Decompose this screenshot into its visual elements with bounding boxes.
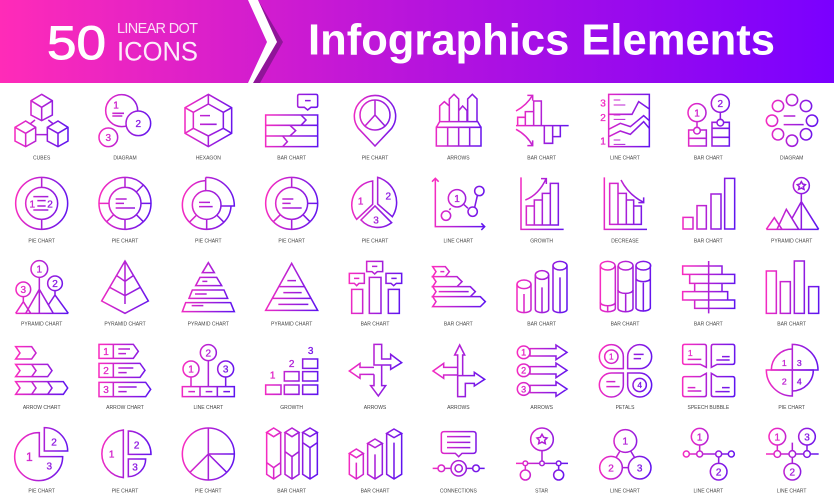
label: arrows: ARROWS (447, 405, 470, 411)
title: Infographics Elements (308, 16, 775, 64)
icon: pie chart numbered: 2 (47, 199, 53, 210)
label: pyramid chart: PYRAMID CHART (188, 322, 229, 328)
icon: bar chart isometric tall (267, 428, 317, 479)
label: bar chart: BAR CHART (277, 155, 306, 161)
icon: growth blocks: 3 (308, 346, 314, 357)
icon: bar chart up and down (516, 95, 569, 146)
icon: pie chart quarters: 4 (797, 377, 802, 387)
icon: line chart axes: 1 (454, 194, 460, 205)
icon: arrows numbered: 1 (521, 348, 526, 358)
label: hexagon: HEXAGON (196, 155, 221, 161)
icon: bar chart with badges (688, 94, 729, 146)
label: pyramid chart: PYRAMID CHART (771, 238, 812, 244)
icon: petals: 4 (637, 380, 642, 390)
icon: line chart badges: 1 (188, 365, 194, 376)
icon: hexagon (185, 94, 232, 147)
label: pie chart: PIE CHART (362, 238, 388, 244)
label: line chart: LINE CHART (610, 155, 640, 161)
icon: connections (433, 432, 485, 476)
icon: line chart three nodes: 1 (775, 432, 781, 443)
icon: decrease (604, 177, 647, 229)
icon: pie chart quarters: 2 (782, 377, 787, 387)
icon: pyramid chart numbered: 2 (52, 279, 58, 290)
label: bar chart: BAR CHART (361, 488, 389, 494)
icon: pie chart three slices: 3 (373, 216, 379, 227)
icon: diagram: 3 (106, 133, 112, 144)
icon: line chart triad (600, 430, 651, 479)
icon: pie chart numbered: 1 (30, 199, 36, 210)
icon: pie chart quarters (766, 344, 818, 396)
icon: bar chart horizontal (683, 261, 735, 313)
icon: pie chart seven spokes (99, 177, 151, 229)
label: arrows: ARROWS (364, 405, 387, 411)
icon: pie chart three slices: 1 (358, 197, 364, 208)
icon: line chart two nodes: 1 (697, 432, 703, 443)
icon: speech bubbles: 1 (688, 348, 693, 358)
label: line chart: LINE CHART (444, 238, 473, 244)
icon: line chart three nodes (766, 428, 819, 480)
icon: growth (521, 177, 564, 229)
label: star: STAR (535, 488, 549, 494)
label: bar chart: BAR CHART (611, 322, 639, 328)
icon: pyramid chart numbered: 1 (37, 265, 43, 276)
icon: diagram ring (766, 94, 818, 146)
icon: line chart triad: 2 (608, 463, 614, 474)
label: pie chart: PIE CHART (195, 238, 222, 244)
label: growth: GROWTH (530, 238, 553, 244)
icon: petals (599, 345, 652, 397)
icon: arrow chart numbered (99, 344, 151, 397)
icon: arrows numbered: 3 (521, 384, 526, 394)
icon: arrow chart numbered: 3 (103, 385, 109, 396)
label: line chart: LINE CHART (777, 488, 806, 494)
icon: arrow chart numbered: 1 (103, 347, 109, 358)
icon: line chart badges: 3 (223, 365, 229, 376)
icon: arrows numbered: 2 (521, 366, 526, 376)
icon: arrows (436, 94, 481, 146)
icon: arrows up left right (433, 345, 485, 397)
label: arrows: ARROWS (447, 155, 470, 161)
icon: line chart triad: 3 (637, 463, 643, 474)
icon: pie chart five spokes (266, 177, 318, 229)
label: diagram: DIAGRAM (113, 155, 137, 161)
icon: pie chart large slice: 2 (51, 437, 57, 448)
icon: diagram: 2 (136, 119, 142, 130)
icon: pie chart half and quarters: 2 (134, 441, 140, 452)
label: arrow chart: ARROW CHART (23, 405, 61, 411)
icon: star (516, 428, 568, 480)
icon: pie chart half and quarters: 3 (132, 462, 138, 473)
label: line chart: LINE CHART (610, 488, 640, 494)
count: 50: 50 (47, 16, 106, 69)
label: bar chart: BAR CHART (694, 155, 723, 161)
icon: pyramid chart star (766, 178, 819, 229)
icon: line chart badges (182, 345, 234, 397)
icon: arrow chart numbered: 2 (103, 366, 109, 377)
label: pie chart: PIE CHART (362, 155, 388, 161)
label: bar chart: BAR CHART (277, 488, 306, 494)
icon: pie chart half and quarters: 1 (109, 450, 115, 461)
label: pyramid chart: PYRAMID CHART (104, 322, 146, 328)
label: pie chart: PIE CHART (28, 238, 55, 244)
icon: pie chart large slice: 3 (47, 462, 53, 473)
label: pie chart: PIE CHART (195, 488, 222, 494)
label: pie chart: PIE CHART (28, 488, 55, 494)
icon: arrow chart chevrons (16, 347, 68, 394)
icon: pyramid chart numbered: 3 (21, 285, 27, 296)
icon: line chart badges: 2 (206, 348, 212, 359)
icon: bar chart with bubbles (349, 261, 402, 313)
label: arrows: ARROWS (530, 405, 554, 411)
icon: pie chart quarters: 3 (797, 358, 802, 368)
icon: bar chart columns (766, 261, 819, 313)
icon: line chart two nodes: 2 (716, 467, 722, 478)
icon: pie chart pin (354, 95, 396, 146)
icon: petals: 1 (609, 352, 614, 362)
icon: pyramid chart stacked (182, 263, 234, 312)
icon: cylinder bars rising (517, 261, 567, 313)
icon: line chart axes (432, 178, 485, 230)
label: bar chart: BAR CHART (527, 155, 556, 161)
icon: bar chart arrow layers (433, 267, 485, 307)
icon: pie chart quarters: 1 (782, 358, 787, 368)
icon: line chart triad: 1 (623, 437, 629, 448)
icon: line chart (600, 94, 649, 148)
icon: pyramid chart chevrons (102, 261, 148, 313)
label: pie chart: PIE CHART (778, 405, 805, 411)
label: petals: PETALS (616, 405, 635, 411)
label: speech bubble: SPEECH BUBBLE (687, 405, 730, 411)
label: cubes: CUBES (33, 155, 51, 161)
icon: line chart three nodes: 2 (790, 467, 796, 478)
icon: bar chart rising (683, 178, 735, 229)
icon grid (15, 94, 819, 494)
icon: growth blocks: 1 (270, 371, 276, 382)
label: decrease: DECREASE (611, 238, 639, 244)
subtitle: linear dot: LINEAR DOT (117, 21, 198, 37)
icon: pie chart three slices (352, 177, 397, 227)
icon: line chart three nodes: 3 (804, 432, 810, 443)
label: pyramid chart: PYRAMID CHART (21, 322, 62, 328)
icon: bar chart with badges: 2 (718, 99, 724, 110)
icon: arrows three way (349, 344, 402, 396)
label: connections: CONNECTIONS (440, 488, 477, 494)
subtitle: icons: ICONS (117, 36, 198, 66)
label: bar chart: BAR CHART (694, 238, 723, 244)
banner (0, 0, 834, 83)
label: bar chart: BAR CHART (444, 322, 473, 328)
icon: line chart: 1 (600, 137, 606, 148)
label: bar chart: BAR CHART (694, 322, 723, 328)
icon: line chart two nodes (683, 428, 734, 480)
label: pie chart: PIE CHART (278, 238, 305, 244)
icon: pyramid chart numbered (16, 261, 68, 313)
icon: pie chart three slices: 2 (386, 191, 392, 202)
label: growth: GROWTH (280, 405, 303, 411)
label: line chart: LINE CHART (694, 488, 723, 494)
icon: bar chart isometric rising (349, 429, 402, 479)
icon: bar chart with badges: 1 (694, 108, 700, 119)
icon: pie chart numbered (16, 177, 68, 229)
icon: line chart: 2 (600, 113, 606, 124)
label: arrow chart: ARROW CHART (106, 405, 144, 411)
label: diagram: DIAGRAM (780, 155, 803, 161)
icon: speech bubbles (683, 344, 735, 397)
label: pyramid chart: PYRAMID CHART (271, 322, 312, 328)
icon: diagram (99, 95, 151, 147)
label: bar chart: BAR CHART (527, 322, 556, 328)
icon: diagram: 1 (113, 101, 119, 112)
icon: cylinder bars tall (600, 261, 651, 312)
label: bar chart: BAR CHART (777, 322, 806, 328)
icon: growth blocks (266, 346, 318, 394)
icon: line chart: 3 (600, 98, 606, 109)
icon: pie chart raised slice (182, 177, 234, 229)
label: bar chart: BAR CHART (361, 322, 389, 328)
icon: pie chart large slice (15, 428, 68, 481)
icon: growth blocks: 2 (289, 359, 295, 370)
icon: bar chart (266, 94, 318, 147)
icon: pie chart half and quarters (102, 430, 151, 478)
icon: pie chart four sectors (182, 428, 234, 480)
icon: cubes (15, 94, 68, 147)
icon: arrows numbered (517, 345, 567, 396)
label: pie chart: PIE CHART (112, 238, 138, 244)
label: line chart: LINE CHART (194, 405, 223, 411)
icon: pie chart large slice: 1 (26, 450, 33, 464)
icon: pyramid chart lined (266, 263, 318, 310)
label: pie chart: PIE CHART (112, 488, 138, 494)
